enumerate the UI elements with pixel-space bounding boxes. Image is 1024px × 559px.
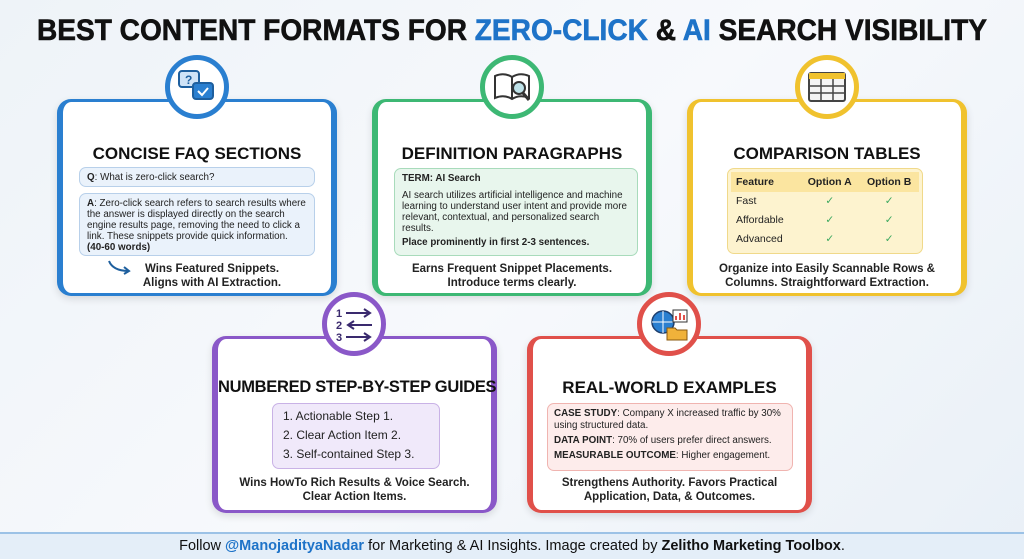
takeaway xyxy=(239,477,470,503)
icon: numbered arrows: 2 xyxy=(336,320,342,332)
table: ✓ xyxy=(825,195,834,207)
table: Affordable xyxy=(736,214,784,226)
takeaway: Introduce terms clearly. xyxy=(448,277,576,289)
table: ✓ xyxy=(825,214,834,226)
table: Option B xyxy=(867,176,911,188)
title: BEST CONTENT FORMATS FOR ZERO-CLICK & AI SEARCH VISIBILITY xyxy=(37,14,987,47)
icon: numbered arrows xyxy=(322,292,386,356)
answer box: A: Zero-click search refers to search results where the answer is displayed directly on the search engine results page, removing the need to click a link. These snippets provide quick information. (40-60 words) xyxy=(87,198,306,253)
takeaway: Columns. Straightforward Extraction. xyxy=(725,277,929,289)
heading: definition: DEFINITION PARAGRAPHS xyxy=(402,144,622,163)
icon: FAQ bubbles xyxy=(165,55,229,119)
panel: examples xyxy=(527,336,812,513)
table: ✓ xyxy=(885,214,894,226)
takeaway: Aligns with AI Extraction. xyxy=(143,277,281,289)
panel: comparison xyxy=(687,99,967,296)
steps list: 2. Clear Action Item 2. xyxy=(283,428,401,442)
table xyxy=(727,168,923,254)
steps list: 3. Self-contained Step 3. xyxy=(283,447,414,461)
table: ✓ xyxy=(825,233,834,245)
question box: Q: What is zero-click search? xyxy=(87,172,214,183)
takeaway xyxy=(719,263,935,289)
takeaway xyxy=(562,477,777,503)
takeaway xyxy=(143,263,281,289)
panel: FAQ xyxy=(57,99,337,296)
heading: comparison: COMPARISON TABLES xyxy=(733,144,921,163)
examples box: CASE STUDY: Company X increased traffic by 30% using structured data. DATA POINT: 70% of users prefer direct answers. MEASURABLE OUTCOME: Higher engagement. xyxy=(554,408,781,461)
takeaway xyxy=(412,263,612,289)
takeaway: Wins HowTo Rich Results & Voice Search. xyxy=(239,477,470,489)
panel: steps xyxy=(212,336,497,513)
table: Fast xyxy=(736,195,756,207)
panel: definition xyxy=(372,99,652,296)
arrow xyxy=(108,260,131,275)
takeaway: Strengthens Authority. Favors Practical xyxy=(562,477,777,489)
heading: FAQ: CONCISE FAQ SECTIONS xyxy=(93,144,301,163)
table: Option A xyxy=(808,176,852,188)
footer: Follow @ManojadityaNadar for Marketing & AI Insights. Image created by Zelitho Marketing Toolbox. xyxy=(179,538,845,554)
takeaway: Clear Action Items. xyxy=(303,491,406,503)
icon: book magnifier xyxy=(480,55,544,119)
definition box: TERM: AI Search AI search utilizes artificial intelligence and machine learning to understand user intent and provide more relevant, contextual, and personalized search results. Place prominently in first 2-3 sentences. xyxy=(402,173,627,248)
table: Advanced xyxy=(736,233,783,245)
steps list: 1. Actionable Step 1. xyxy=(283,409,393,423)
heading: examples: REAL-WORLD EXAMPLES xyxy=(562,378,777,397)
table: ✓ xyxy=(885,195,894,207)
table: ✓ xyxy=(885,233,894,245)
takeaway: Application, Data, & Outcomes. xyxy=(584,491,755,503)
table: Feature xyxy=(736,176,774,188)
icon: table xyxy=(795,55,859,119)
heading: steps: NUMBERED STEP-BY-STEP GUIDES xyxy=(218,378,496,396)
icon: globe chart folder xyxy=(637,292,701,356)
steps list xyxy=(272,403,440,469)
takeaway: Wins Featured Snippets. xyxy=(145,263,279,275)
footer xyxy=(0,532,1024,559)
takeaway: Earns Frequent Snippet Placements. xyxy=(412,263,612,275)
icon: numbered arrows: 1 xyxy=(336,308,342,320)
question box xyxy=(79,167,315,187)
icon: FAQ bubbles: ? xyxy=(185,73,192,87)
takeaway: Organize into Easily Scannable Rows & xyxy=(719,263,935,275)
